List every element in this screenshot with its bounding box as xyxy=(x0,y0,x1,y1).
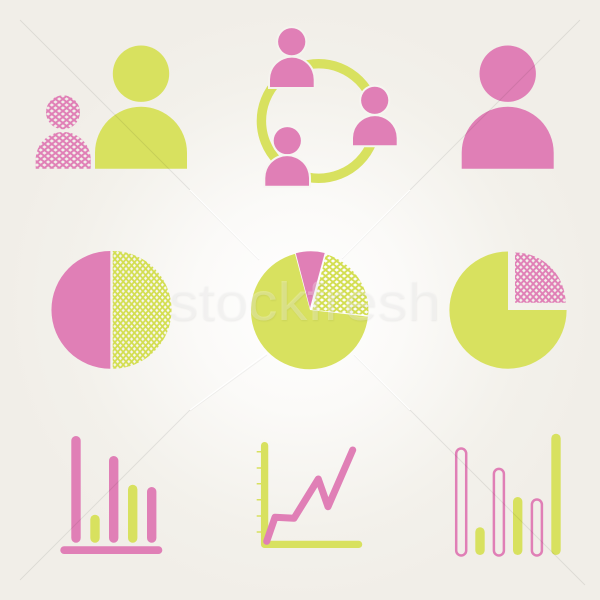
watermark text: stockfresh xyxy=(168,272,440,332)
axis ticks xyxy=(257,452,262,532)
bottom person xyxy=(265,127,309,186)
bar chart: solid bars on base xyxy=(60,436,162,554)
outlined bar 5 xyxy=(532,500,542,556)
bar 2 xyxy=(90,515,100,543)
right person xyxy=(353,87,397,145)
icon: person pair xyxy=(36,45,187,169)
lime bar 2 xyxy=(475,527,485,555)
outlined bar 3 xyxy=(494,469,504,556)
pie chart: quarter cut out xyxy=(449,252,567,369)
icon: single pink person xyxy=(462,45,554,169)
bar 5 xyxy=(147,487,156,543)
pie chart: half and half xyxy=(51,251,172,369)
pink trend line xyxy=(267,450,353,541)
outlined bar 1 xyxy=(456,448,466,556)
pink half xyxy=(51,251,110,369)
watermark text: stockfresh xyxy=(169,273,441,333)
small hatched person xyxy=(36,95,91,169)
icon: connected people network xyxy=(261,28,397,186)
bar 1 xyxy=(71,436,81,543)
pink wedge xyxy=(296,251,325,308)
lime bar 4 xyxy=(513,497,522,555)
lime main slice xyxy=(251,254,368,369)
hatched lime half xyxy=(113,251,172,369)
bar chart: outlined and solid bars xyxy=(456,434,561,556)
lime three-quarter slice xyxy=(449,252,567,369)
axes xyxy=(265,446,359,544)
pie chart: three slices xyxy=(251,251,368,369)
base line xyxy=(60,546,162,554)
top person xyxy=(270,28,314,87)
large lime person xyxy=(95,45,187,169)
lime bar 6 xyxy=(551,434,561,555)
lime ring xyxy=(261,64,376,178)
line chart xyxy=(257,446,359,544)
hatched pink quarter xyxy=(515,252,566,303)
bar 4 xyxy=(128,485,137,543)
bar 3 xyxy=(109,456,118,543)
hatched lime slice xyxy=(312,254,368,315)
